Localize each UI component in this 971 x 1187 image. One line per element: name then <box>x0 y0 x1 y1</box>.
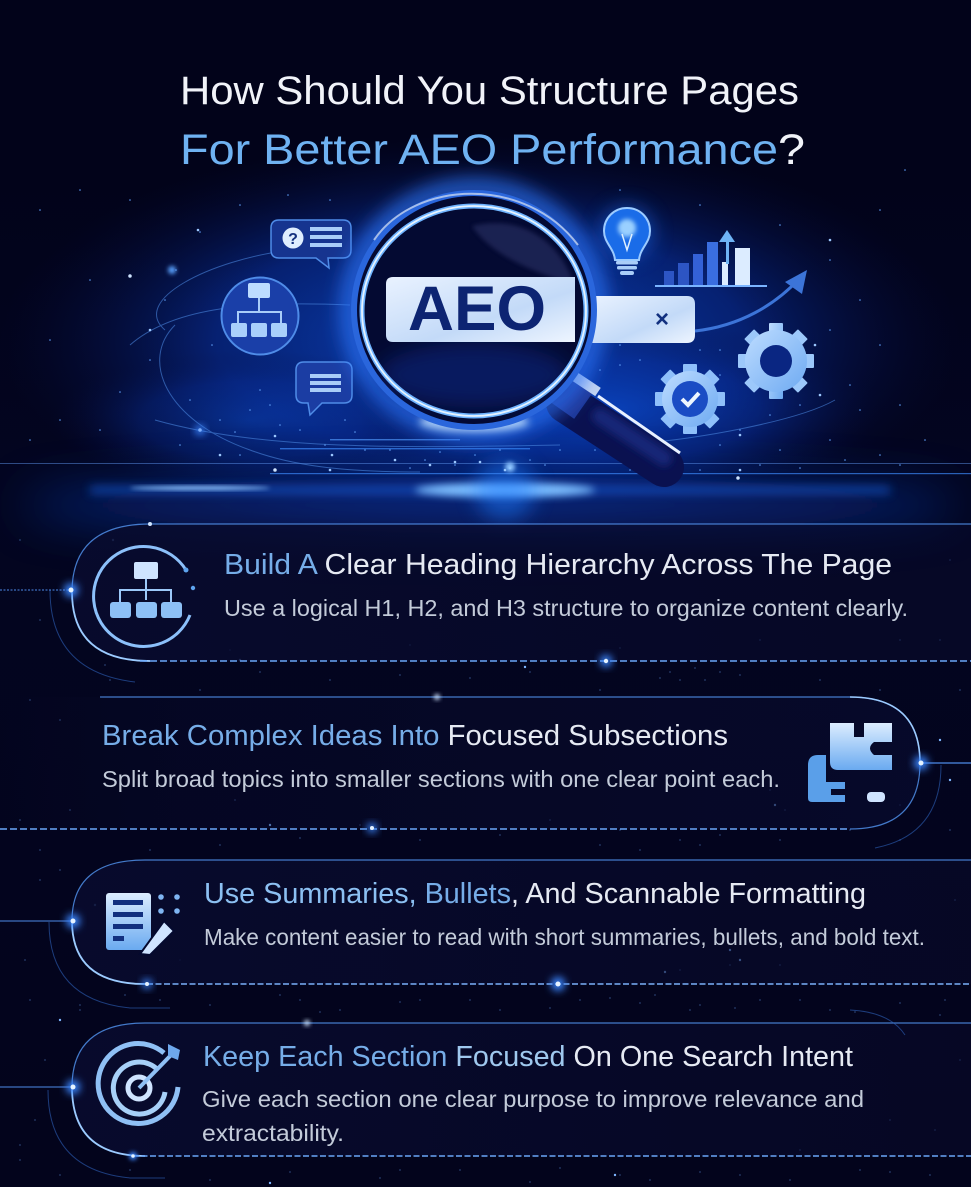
heading: Build A Clear Heading Hierarchy Across The Page <box>224 549 892 581</box>
icon: check gear <box>655 364 725 434</box>
lens rings <box>354 193 594 427</box>
lens glow <box>350 188 598 432</box>
icon: light bulb <box>601 206 653 275</box>
icon: document and pen <box>106 893 180 955</box>
title: How Should You Structure Pages <box>180 69 799 113</box>
heading: Break Complex Ideas Into Focused Subsections <box>102 720 728 752</box>
icon: target and dart <box>98 1044 180 1124</box>
title: For Better AEO Performance <box>180 126 778 174</box>
title: ? <box>778 126 805 174</box>
icon: chat bubble with question: ? <box>288 231 298 248</box>
lens glass <box>353 192 595 428</box>
AEO search box: AEO <box>408 274 546 344</box>
icon: chat bubble with question <box>271 220 351 268</box>
icon: hierarchy <box>94 546 195 646</box>
orbit lines <box>130 250 835 472</box>
description: Make content easier to read with short summaries, bullets, and bold text. <box>204 924 925 950</box>
heading: Use Summaries, Bullets, And Scannable Formatting <box>204 878 866 910</box>
panel: heading hierarchy <box>0 522 971 682</box>
icon: puzzle pieces <box>808 723 892 802</box>
search bar extension: × <box>655 306 669 333</box>
magnifier handle <box>560 376 680 467</box>
description: Give each section one clear purpose to improve relevance and <box>202 1086 864 1112</box>
title <box>180 69 805 174</box>
description <box>202 1086 864 1146</box>
icon: large gear <box>738 323 814 399</box>
search bar extension <box>590 296 695 343</box>
description: Use a logical H1, H2, and H3 structure to organize content clearly. <box>224 595 908 621</box>
icon: rising bar chart <box>655 230 767 287</box>
icon: magnifying glass <box>350 188 695 467</box>
panel: subsections <box>0 694 971 848</box>
heading: Keep Each Section Focused On One Search Intent <box>203 1041 853 1073</box>
horizon light beams <box>0 439 971 520</box>
panel: scannable formatting <box>0 860 971 1008</box>
icon: site hierarchy circle <box>222 278 298 354</box>
description: extractability. <box>202 1120 344 1146</box>
arrow: growth curve <box>695 270 807 331</box>
icon: chat bubble with lines <box>296 362 352 415</box>
panel: one search intent <box>0 1010 971 1178</box>
glow nodes hero <box>168 266 515 472</box>
description: Split broad topics into smaller sections with one clear point each. <box>102 766 780 792</box>
